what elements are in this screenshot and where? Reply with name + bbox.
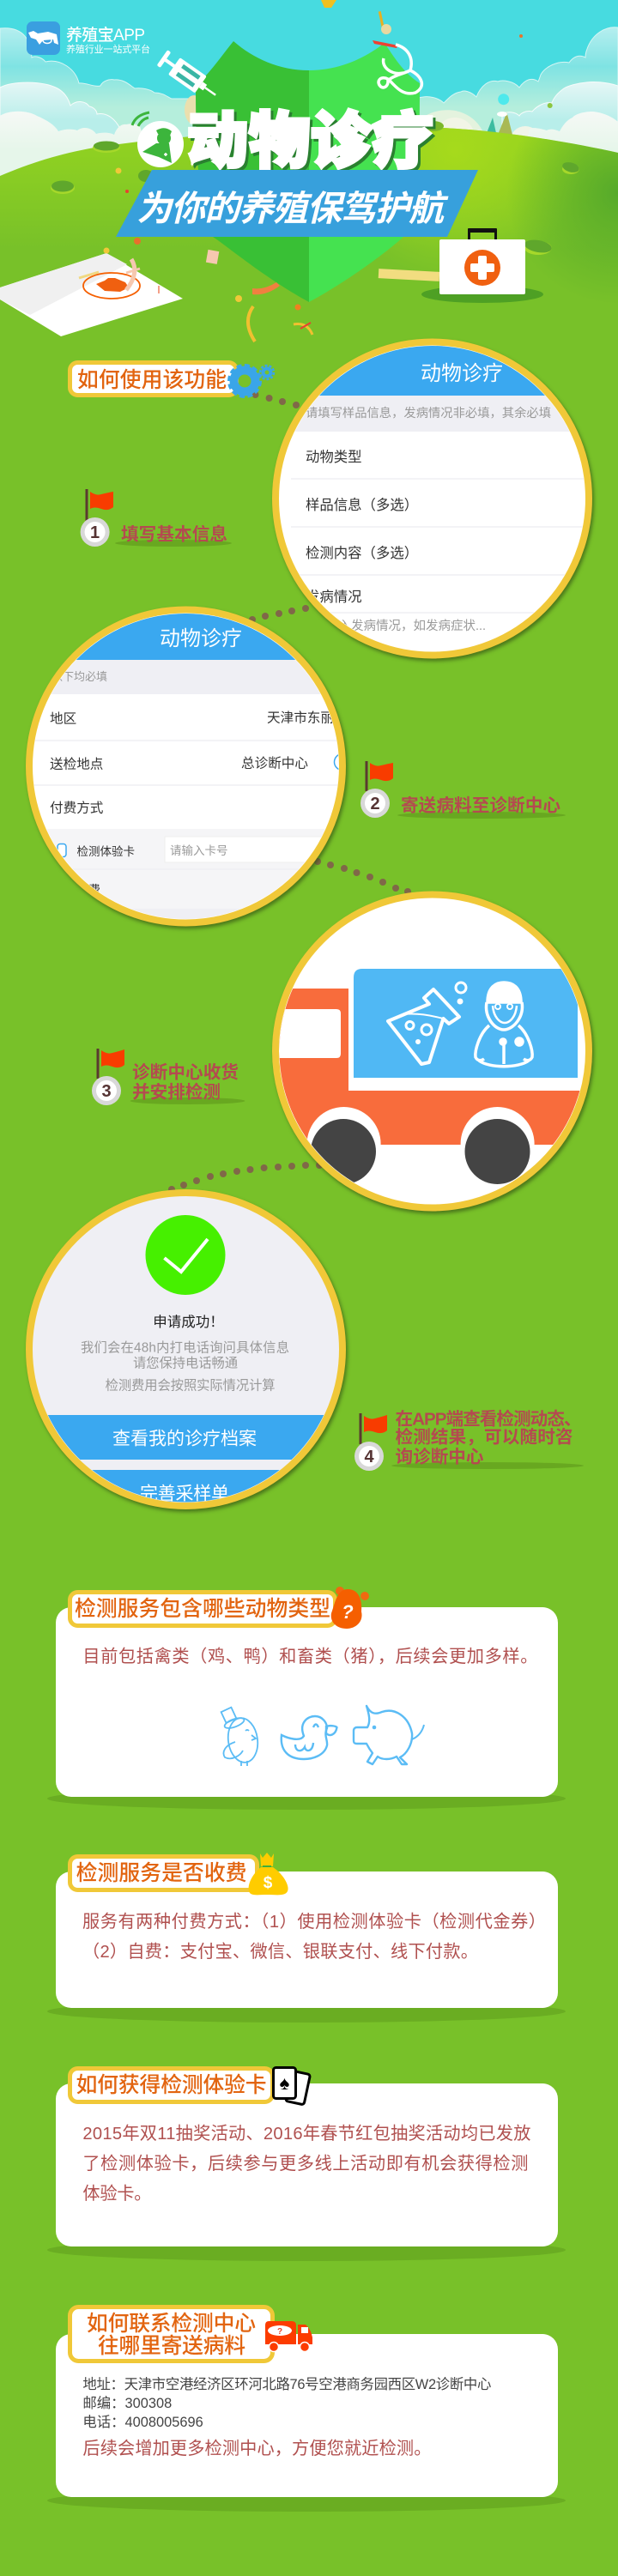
panel: animal types (47, 1587, 566, 1810)
panel: step 1 phone screen: 样品信息（多选） (306, 498, 418, 513)
panel: step 1 phone screen: 请输入发病情况，如发病症状... (314, 619, 486, 633)
panel: step 3 truck (272, 894, 592, 1213)
body text (82, 1912, 546, 1962)
body text: 了检测体验卡，后续参与更多线上活动即有机会获得检测 (82, 2154, 528, 2174)
step 3 label (132, 1062, 239, 1102)
app slogan: 养殖行业一站式平台 (66, 43, 150, 55)
panel: step 2 phone screen: 天津市东丽区 (267, 711, 348, 726)
panel: step 4 success screen: 我们会在48h内打电话询问具体信息 (81, 1340, 289, 1356)
wheels (307, 1107, 381, 1145)
panel: step 2 phone screen: 动物诊疗 (160, 627, 242, 650)
step 2 label: 寄送病料至诊断中心 (401, 796, 560, 815)
panel: step 2 phone screen: 地区 (50, 711, 76, 726)
address block (82, 2377, 491, 2430)
panel: step 2 phone screen: 检测体验卡 (77, 845, 135, 858)
heading: how to use: 如何使用该功能 (77, 368, 227, 392)
tan disc behind shield (185, 95, 196, 124)
icon: syringe (157, 50, 216, 96)
icon: question blob: ? (342, 1601, 354, 1623)
address block: 邮编：300308 (82, 2396, 172, 2411)
icon: pig (354, 1706, 424, 1764)
grass mounds (51, 121, 580, 255)
step 3 label: 并安排检测 (132, 1081, 221, 1102)
title: 动物诊疗 (187, 108, 433, 176)
panel: contact (47, 2307, 566, 2512)
hill (0, 128, 618, 278)
step 3 marker (92, 1049, 124, 1105)
panel: animal types: 检测服务包含哪些动物类型 (75, 1597, 330, 1621)
mountains (487, 112, 512, 135)
heading (70, 1857, 258, 1890)
body text: （2）自费：支付宝、微信、银联支付、线下付款。 (82, 1942, 478, 1962)
panel: step 2 phone screen: 以下均必填 (52, 670, 107, 683)
icon: money bag (249, 1853, 288, 1895)
panel: step 4 success screen: 检测费用会按照实际情况计算 (106, 1378, 276, 1394)
icon: chicken (221, 1708, 260, 1766)
step 1 marker (81, 489, 113, 547)
panel: step 2 phone screen: 付费方式 (50, 800, 104, 815)
dotted path: heading to step 1 (252, 391, 300, 408)
step 1 label: 填写基本信息 (121, 523, 227, 544)
dotted path: step 2 to step 3 (314, 858, 411, 895)
heading: how to use (70, 362, 237, 395)
panel: step 1 phone screen: 动物类型 (306, 450, 362, 465)
step 4 label (395, 1409, 582, 1467)
truck body (272, 989, 592, 1145)
step 1 marker: 1 (90, 523, 100, 542)
panel: contact: 如何联系检测中心 (87, 2312, 256, 2336)
panel: step 4 success screen: 请您保持电话畅通 (133, 1356, 238, 1371)
heading (70, 2068, 273, 2102)
panel: step 1 phone screen: 请填写样品信息，发病情况非必填，其余必填 (306, 405, 551, 420)
step 4 marker (354, 1413, 387, 1471)
panel: step 4 success screen: 完善采样单 (140, 1485, 229, 1503)
icon: stethoscope (379, 45, 421, 94)
step 4 label: 询诊断中心 (395, 1447, 484, 1467)
icon: delivery truck (265, 2321, 312, 2351)
panel: step 1 phone screen (272, 338, 592, 656)
flag (366, 761, 367, 791)
step 4 marker: 4 (364, 1448, 374, 1466)
flag (359, 1413, 362, 1444)
clouds (0, 27, 618, 189)
panel: step 1 phone screen: 检测内容（多选） (306, 546, 418, 561)
panel: step 2 phone screen (26, 606, 350, 930)
panel: fees: 检测服务是否收费 (76, 1861, 247, 1885)
icon: paper with stamp (0, 247, 183, 336)
body text: 服务有两种付费方式：（1）使用检测体验卡（检测代金券） (82, 1912, 546, 1932)
icon: question blob (331, 1587, 369, 1629)
body text: 体验卡。 (82, 2184, 151, 2204)
panel: step 2 phone screen: 自费 (76, 883, 100, 897)
address block: 电话：4008005696 (82, 2415, 203, 2430)
address block: 地址：天津市空港经济区环河北路76号空港商务园西区W2诊断中心 (82, 2377, 491, 2392)
sky (0, 0, 618, 103)
step 4 label shadow (391, 1462, 584, 1469)
step 4 label: 检测结果，可以随时咨 (395, 1426, 573, 1447)
panel: contact: 往哪里寄送病料 (98, 2334, 245, 2358)
dotted path: step 1 to step 2 (249, 605, 309, 623)
icon: duck (282, 1716, 336, 1759)
panel: step 2 phone screen: 送检地点 (50, 757, 103, 772)
body text (82, 2124, 530, 2204)
dotted path: step 3 to step 4 (168, 1162, 323, 1193)
step 3 label shadow (130, 1098, 245, 1104)
subtitle banner: 为你的养殖保驾护航 (135, 189, 451, 228)
panel: step 1 phone screen: 动物诊疗 (421, 362, 503, 385)
icon: medical kit (421, 228, 543, 303)
panel: test card: 如何获得检测体验卡 (76, 2073, 267, 2097)
step 2 marker (360, 761, 393, 818)
icon: check (146, 1215, 225, 1295)
note: 后续会增加更多检测中心，方便您就近检测。 (82, 2439, 431, 2458)
subtitle banner (116, 170, 478, 237)
panel: test card (47, 2068, 566, 2261)
sky dots (498, 34, 553, 108)
icon: money bag: $ (264, 1874, 273, 1892)
icon: nurse badge (132, 112, 184, 167)
panel: step 2 phone screen: 请输入卡号 (170, 844, 228, 857)
shield (196, 41, 420, 302)
panel: fees (47, 1853, 566, 2023)
panel: step 1 phone screen: 发病情况 (306, 590, 362, 605)
step 3 label: 诊断中心收货 (132, 1062, 239, 1083)
step 4 label: 在APP端查看检测动态、 (395, 1409, 582, 1430)
body text: 2015年双11抽奖活动、2016年春节红包抽奖活动均已发放 (82, 2124, 530, 2144)
icon: delivery truck: ? (277, 2327, 282, 2337)
flag (86, 489, 88, 521)
step 1 label shadow (115, 540, 232, 547)
panel: step 4 success screen (26, 1193, 346, 1521)
icon: flask (388, 983, 466, 1064)
app name: 养殖宝APP (66, 26, 145, 45)
flag (96, 1049, 100, 1079)
hero scene (0, 0, 618, 350)
icon: gears (229, 366, 274, 396)
step 3 marker: 3 (101, 1082, 112, 1101)
panel: step 2 phone screen: 总诊断中心 (241, 755, 308, 771)
confetti (115, 0, 457, 350)
heading (70, 2307, 273, 2361)
panel: step 4 success screen: 查看我的诊疗档案 (112, 1430, 257, 1448)
icon: playing cards: ♠ (280, 2072, 290, 2094)
icon: doctor (476, 983, 532, 1067)
body text: 目前包括禽类（鸡、鸭）和畜类（猪），后续会更加多样。 (82, 1647, 537, 1666)
panel: step 4 success screen: 申请成功！ (153, 1314, 224, 1330)
icon: app logo (27, 21, 60, 55)
icon: playing cards (273, 2068, 311, 2105)
heading (70, 1593, 335, 1625)
step 2 marker: 2 (370, 795, 380, 813)
step 2 label shadow (397, 812, 566, 819)
